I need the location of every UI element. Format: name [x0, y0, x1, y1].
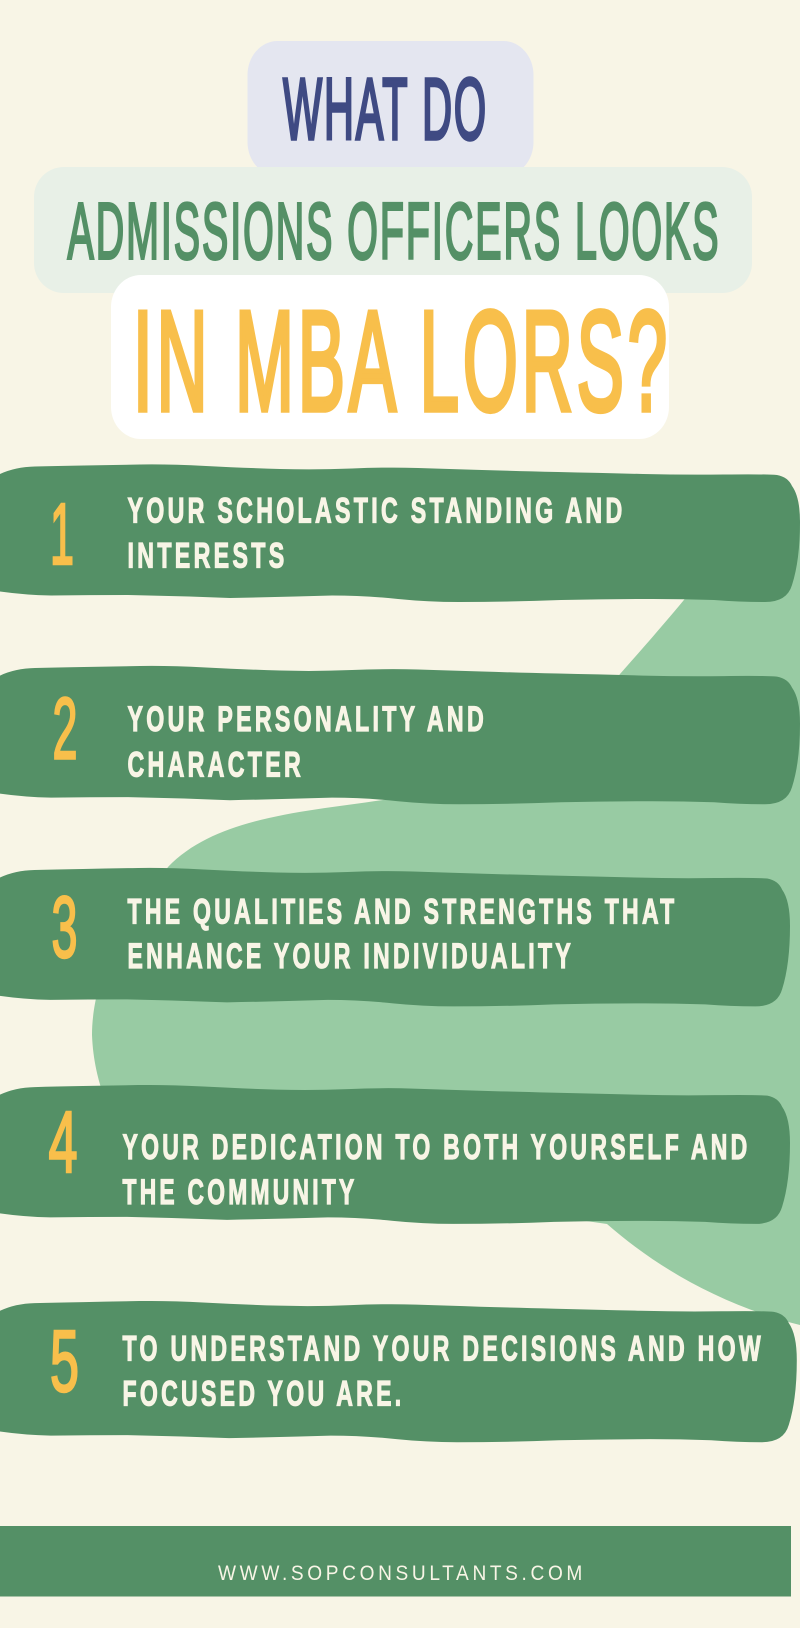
item 5	[0, 1301, 797, 1442]
item 5 text	[122, 1330, 764, 1414]
item 4 text	[122, 1128, 750, 1212]
item 3 text: ENHANCE YOUR INDIVIDUALITY	[128, 937, 574, 976]
title pill: in mba lors	[111, 275, 671, 441]
item 4	[0, 1085, 790, 1224]
item 3 text	[128, 892, 678, 976]
item 1 text	[128, 492, 626, 576]
title pill: what do	[248, 41, 534, 176]
website url: WWW.SOPCONSULTANTS.COM	[218, 1562, 586, 1585]
item 2 text: CHARACTER	[128, 746, 304, 784]
item 1: 1	[50, 486, 74, 583]
number 3: 3	[52, 879, 78, 976]
title pill: what do: WHAT DO	[283, 61, 488, 158]
title pill: admissions officers looks	[34, 167, 752, 293]
footer bar	[0, 1526, 791, 1596]
item 2 text: YOUR PERSONALITY AND	[128, 700, 487, 739]
item 1 text: INTERESTS	[128, 536, 288, 576]
item 4 text: THE COMMUNITY	[122, 1173, 358, 1212]
item 3	[0, 868, 790, 1006]
item 5 text: FOCUSED YOU ARE.	[122, 1374, 404, 1414]
background blob	[92, 520, 800, 1325]
item 1	[0, 464, 800, 602]
number 5: 5	[50, 1313, 79, 1410]
number 2: 2	[52, 680, 78, 778]
number 4: 4	[48, 1094, 78, 1191]
item 2	[0, 666, 800, 804]
item 2 text	[128, 700, 487, 784]
